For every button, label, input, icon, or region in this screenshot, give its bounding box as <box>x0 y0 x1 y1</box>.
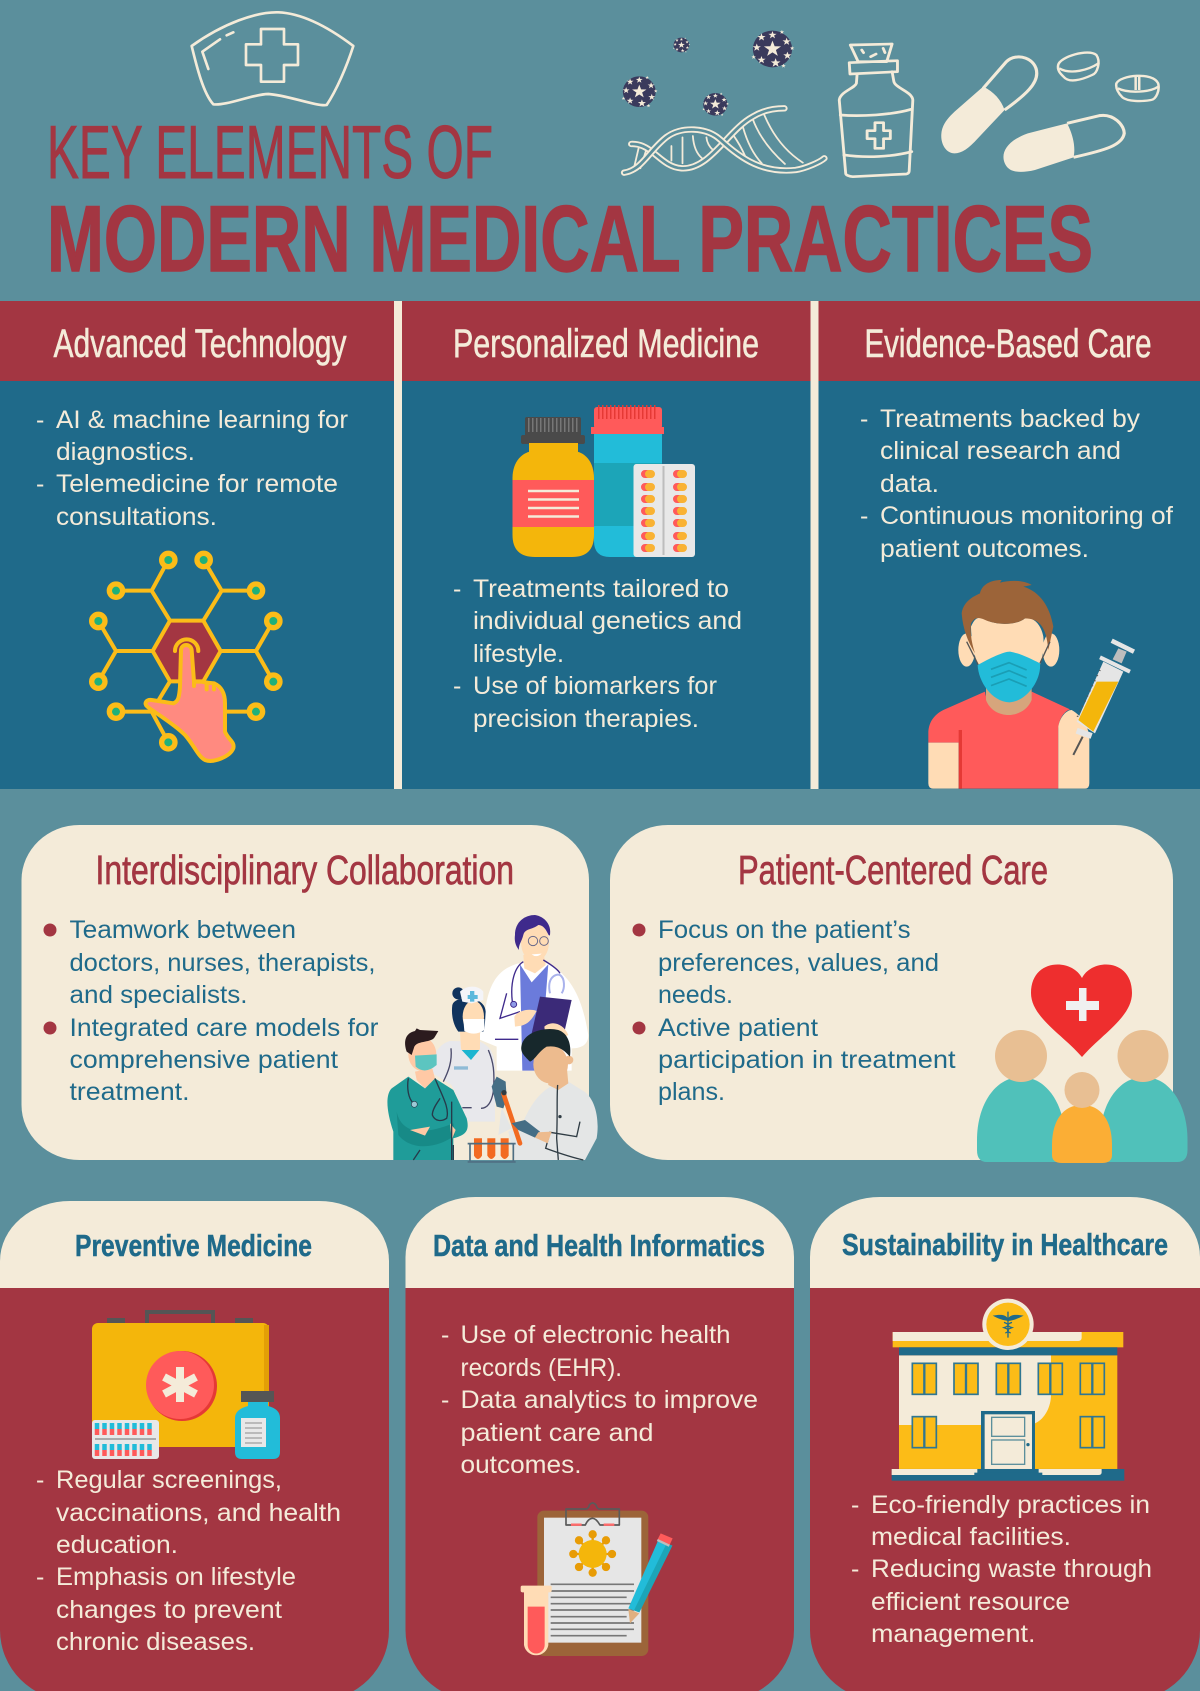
panel: sustainability in healthcare <box>810 1197 1200 1691</box>
heading: advanced technology: Advanced Technology <box>54 322 346 366</box>
text block: evidence-based care: - <box>860 502 868 530</box>
text block: personalized medicine: Use of biomarkers for <box>473 672 717 700</box>
text block: advanced technology: consultations. <box>56 503 217 531</box>
icon: medicine bottles and blister pack <box>512 407 695 557</box>
icon: nurse cap <box>192 12 353 105</box>
text block: patient-centered care: preferences, values, and <box>658 949 939 977</box>
text block: evidence-based care: - <box>860 405 868 433</box>
text block: sustainability in healthcare: management. <box>871 1620 1036 1648</box>
text block: personalized medicine: - <box>453 575 461 603</box>
text block: data and health informatics: - <box>441 1321 449 1349</box>
text block: evidence-based care: patient outcomes. <box>880 535 1089 563</box>
text block: personalized medicine: - <box>453 672 461 700</box>
heading: preventive medicine: Preventive Medicine <box>75 1228 312 1263</box>
text block: preventive medicine <box>36 1466 341 1656</box>
text block: sustainability in healthcare: - <box>851 1555 859 1583</box>
text block: advanced technology: AI & machine learning for <box>56 406 348 434</box>
text block: sustainability in healthcare: - <box>851 1491 859 1519</box>
panel: patient-centered care <box>610 825 1188 1163</box>
icon: hexagon network with touching hand <box>92 553 280 761</box>
text block: sustainability in healthcare: Eco-friendly practices in <box>871 1491 1150 1519</box>
surgeon <box>387 1028 468 1160</box>
text block: data and health informatics: records (EHR). <box>460 1354 622 1382</box>
panel: evidence-based care <box>860 322 1173 789</box>
text block: patient-centered care: participation in treatment <box>658 1046 956 1074</box>
text block: personalized medicine: Treatments tailored to <box>473 575 729 603</box>
doctor <box>477 915 588 1071</box>
scientist <box>492 1029 598 1160</box>
text block: personalized medicine: precision therapies. <box>473 705 699 733</box>
text block: preventive medicine: changes to prevent <box>56 1596 282 1624</box>
text block: preventive medicine: vaccinations, and health <box>56 1499 341 1527</box>
text block: patient-centered care: Focus on the patient’s <box>658 916 910 944</box>
icon: masked patient with syringe <box>928 580 1134 789</box>
text block: patient-centered care <box>632 916 956 1106</box>
panel: personalized medicine <box>453 322 759 733</box>
text block: sustainability in healthcare <box>851 1491 1152 1648</box>
text block: evidence-based care: clinical research and <box>880 437 1121 465</box>
text block: preventive medicine: - <box>36 1563 44 1591</box>
text block: preventive medicine: education. <box>56 1531 178 1559</box>
text block: data and health informatics: patient care and <box>460 1419 654 1447</box>
nurse <box>430 987 495 1122</box>
text block: data and health informatics <box>441 1321 758 1479</box>
text block: data and health informatics: outcomes. <box>460 1451 582 1479</box>
text block: preventive medicine: chronic diseases. <box>56 1628 255 1656</box>
text block: evidence-based care <box>860 405 1173 563</box>
heading: patient-centered care: Patient-Centered Care <box>738 847 1048 893</box>
icon: family with heart <box>977 964 1188 1163</box>
text block: evidence-based care: data. <box>880 470 939 498</box>
icon: DNA helix <box>624 108 824 173</box>
text block: interdisciplinary collaboration: doctors, nurses, therapists, <box>70 949 376 977</box>
panel: advanced technology <box>36 322 348 761</box>
text block: patient-centered care: needs. <box>658 981 733 1009</box>
icon: viruses, DNA, bottle and capsules <box>622 30 1159 177</box>
text block: personalized medicine: lifestyle. <box>473 640 564 668</box>
text block: preventive medicine: Emphasis on lifestyle <box>56 1563 296 1591</box>
icon: hospital building <box>892 1299 1124 1481</box>
text block: personalized medicine: individual genetics and <box>473 607 742 635</box>
heading: interdisciplinary collaboration: Interdisciplinary Collaboration <box>96 847 514 893</box>
test tubes <box>468 1138 516 1162</box>
text block: data and health informatics: - <box>441 1386 449 1414</box>
text block: evidence-based care: Treatments backed by <box>880 405 1141 433</box>
icon: medicine bottle <box>839 44 913 177</box>
text block: preventive medicine: - <box>36 1466 44 1494</box>
text block: advanced technology <box>36 406 348 531</box>
panel: preventive medicine <box>0 1201 389 1691</box>
text block: evidence-based care: Continuous monitoring of <box>880 502 1173 530</box>
text block: patient-centered care: plans. <box>658 1078 725 1106</box>
panel: data and health informatics <box>406 1197 794 1691</box>
text block: advanced technology: diagnostics. <box>56 438 195 466</box>
text block: sustainability in healthcare: Reducing waste through <box>871 1555 1152 1583</box>
panel: interdisciplinary collaboration <box>22 825 598 1162</box>
text block: sustainability in healthcare: efficient resource <box>871 1588 1070 1616</box>
title <box>47 110 1093 291</box>
text block: interdisciplinary collaboration: Integrated care models for <box>70 1014 378 1042</box>
icon: capsules and tablets <box>941 53 1159 172</box>
text block: patient-centered care: Active patient <box>658 1014 818 1042</box>
icon: clipboard, test tube and pencil <box>521 1503 673 1656</box>
heading: personalized medicine: Personalized Medicine <box>453 322 759 366</box>
text block: preventive medicine: Regular screenings, <box>56 1466 282 1494</box>
text block: advanced technology: - <box>36 406 44 434</box>
text block: sustainability in healthcare: medical facilities. <box>871 1523 1071 1551</box>
text block: data and health informatics: Data analytics to improve <box>460 1386 758 1414</box>
text block: interdisciplinary collaboration: comprehensive patient <box>70 1046 338 1074</box>
text block: advanced technology: - <box>36 470 44 498</box>
text block: interdisciplinary collaboration <box>44 916 378 1106</box>
text block: personalized medicine <box>453 575 742 733</box>
panel: top row background <box>0 301 1200 789</box>
text block: interdisciplinary collaboration: and specialists. <box>70 981 248 1009</box>
title line: key elements of: KEY ELEMENTS OF <box>47 110 493 194</box>
text block: data and health informatics: Use of electronic health <box>460 1321 730 1349</box>
icon: medical team <box>387 915 598 1162</box>
icon: viruses <box>622 30 794 116</box>
text block: interdisciplinary collaboration: Teamwork between <box>70 916 296 944</box>
heading: data and health informatics: Data and Health Informatics <box>433 1228 765 1263</box>
icon: first aid kit <box>92 1312 280 1459</box>
text block: advanced technology: Telemedicine for remote <box>56 470 338 498</box>
text block: interdisciplinary collaboration: treatment. <box>70 1078 190 1106</box>
